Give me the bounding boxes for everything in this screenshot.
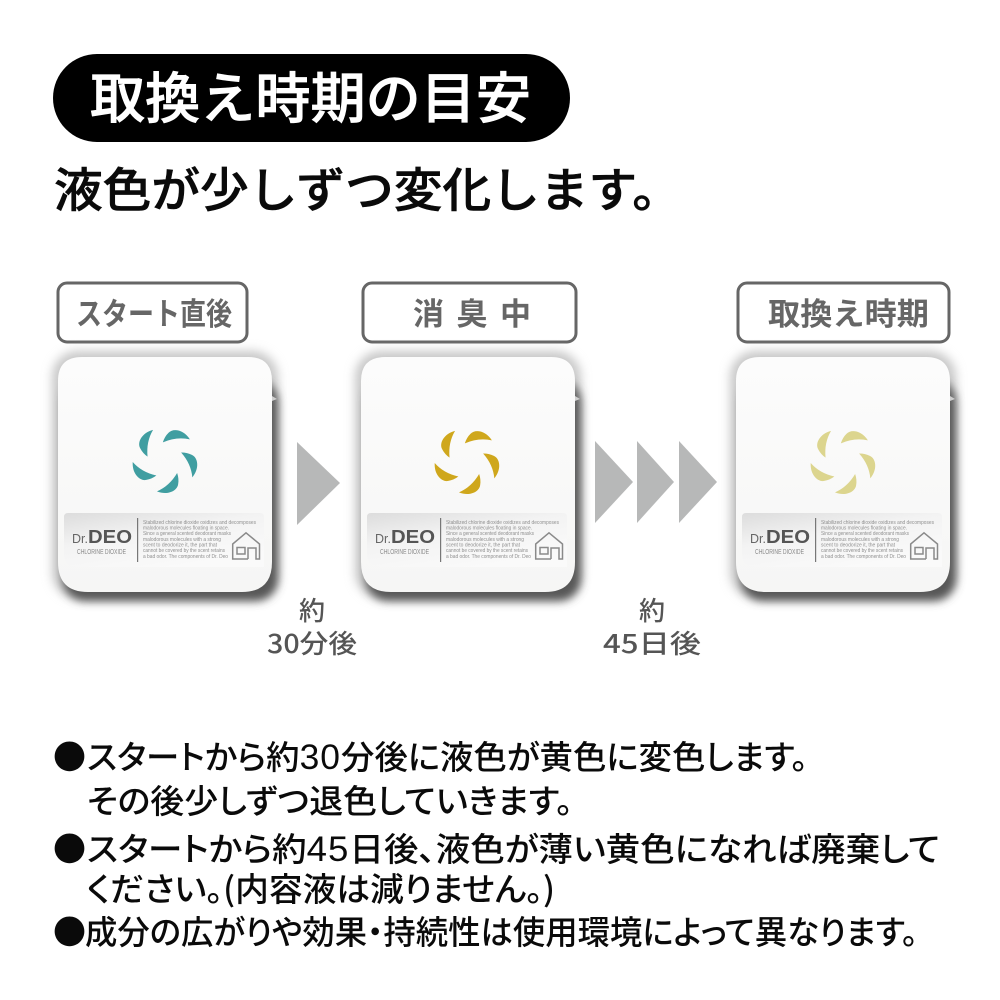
notes list: その後少しずつ退色していきます。 bbox=[87, 775, 573, 823]
product label: a bad odor. The components of Dr. Deo bbox=[446, 554, 531, 560]
caption: about 45 days bbox=[603, 591, 701, 661]
product label: cannot be covered by the scent retains bbox=[143, 548, 225, 554]
product label: malodorous molecules with a strong bbox=[446, 537, 524, 543]
product label: a bad odor. The components of Dr. Deo bbox=[821, 554, 906, 560]
product label: Since a general scented deodorant masks bbox=[143, 531, 231, 537]
notes list: スタートから約30分後に液色が黄色に変色します。 bbox=[87, 731, 808, 779]
caption: about 30 minutes: 約 bbox=[299, 591, 325, 628]
product label: malodorous molecules floating in space. bbox=[821, 526, 907, 532]
notes list: ● bbox=[53, 906, 86, 954]
label: start: スタート直後 bbox=[76, 289, 232, 334]
product label: scent to deodorize it, the part that bbox=[446, 542, 521, 548]
product label: scent to deodorize it, the part that bbox=[143, 542, 218, 548]
notes list: 成分の広がりや効果・持続性は使用環境によって異なります。 bbox=[85, 906, 918, 954]
product label: Dr. bbox=[750, 531, 766, 546]
product label: CHLORINE DIOXIDE bbox=[77, 549, 126, 556]
notes list: スタートから約 45日後、液色が薄い黄色になれば廃棄して bbox=[87, 823, 940, 871]
product label: malodorous molecules floating in space. bbox=[143, 526, 229, 532]
device: replace time (pale yellow) bbox=[730, 351, 956, 601]
product label: Dr. bbox=[375, 531, 391, 546]
product label: cannot be covered by the scent retains bbox=[446, 548, 528, 554]
product label: malodorous molecules with a strong bbox=[143, 537, 221, 543]
product label: cannot be covered by the scent retains bbox=[821, 548, 903, 554]
dial: pale yellow bbox=[806, 427, 882, 500]
notes list: ● bbox=[53, 823, 86, 871]
title pill: 取換え時期の目安 bbox=[90, 54, 531, 134]
caption: about 45 days: 45日後 bbox=[603, 624, 701, 661]
product label: DEO bbox=[391, 527, 435, 547]
label: replace time bbox=[738, 283, 949, 342]
product label: Stabilized chlorine dioxide oxidizes and decomposes bbox=[143, 520, 256, 526]
notes list bbox=[53, 731, 940, 954]
product label: CHLORINE DIOXIDE bbox=[755, 549, 804, 556]
arrow: single bbox=[297, 442, 340, 525]
product label: malodorous molecules with a strong bbox=[821, 537, 899, 543]
dial: yellow bbox=[430, 427, 506, 500]
caption: about 30 minutes bbox=[267, 591, 357, 661]
product label: a bad odor. The components of Dr. Deo bbox=[143, 554, 228, 560]
label: start bbox=[58, 283, 247, 342]
device: start (teal) bbox=[52, 351, 278, 601]
product label: Dr. bbox=[72, 531, 88, 546]
subtitle: 液色が少しずつ変化します。 bbox=[54, 152, 681, 221]
arrow: triple bbox=[595, 441, 717, 523]
product label: DEO bbox=[88, 527, 132, 547]
product label: CHLORINE DIOXIDE bbox=[380, 549, 429, 556]
product label: malodorous molecules floating in space. bbox=[446, 526, 532, 532]
device: deodorizing (yellow) bbox=[355, 351, 581, 601]
product label bbox=[367, 513, 567, 567]
product label: DEO bbox=[766, 527, 810, 547]
label: replace time: 取換え時期 bbox=[768, 289, 929, 334]
caption: about 45 days: 約 bbox=[639, 591, 665, 628]
notes list: ● bbox=[53, 731, 86, 779]
label: deodorizing: 消臭中 bbox=[413, 289, 531, 334]
label: deodorizing bbox=[363, 283, 576, 342]
product label: Stabilized chlorine dioxide oxidizes and decomposes bbox=[446, 520, 559, 526]
product label: scent to deodorize it, the part that bbox=[821, 542, 896, 548]
product label: Stabilized chlorine dioxide oxidizes and decomposes bbox=[821, 520, 934, 526]
dial: teal bbox=[128, 426, 204, 499]
product label bbox=[742, 513, 942, 567]
caption: about 30 minutes: 30分後 bbox=[267, 624, 357, 661]
product label: Since a general scented deodorant masks bbox=[821, 531, 909, 537]
notes list: ください。(内容液は減りません。) bbox=[87, 863, 555, 911]
product label bbox=[64, 513, 264, 567]
product label: Since a general scented deodorant masks bbox=[446, 531, 534, 537]
